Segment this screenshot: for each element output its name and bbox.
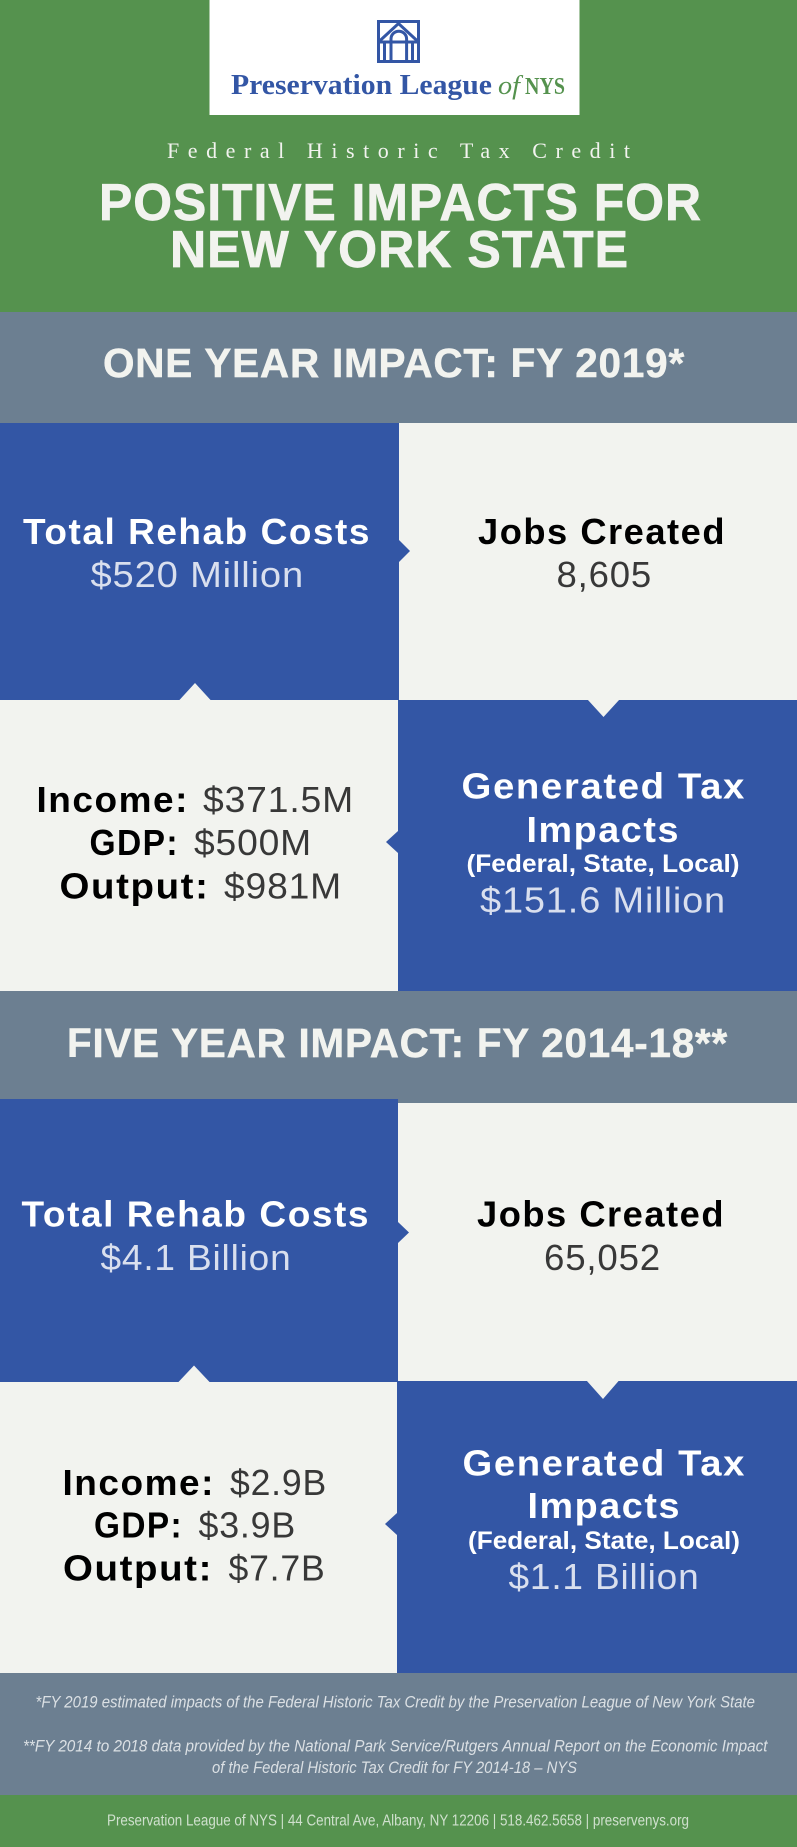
- logo wordmark: Preservation League: [231, 69, 492, 101]
- text: jobs created: [477, 1194, 725, 1278]
- text: income gdp output: $7.7B: [228, 1548, 326, 1588]
- panel: one year heading: ONE YEAR IMPACT: FY 2019*: [103, 340, 685, 386]
- text: total rehab costs: $520 Million: [90, 554, 304, 595]
- panel: one year heading: [0, 312, 797, 423]
- panel: five year heading: FIVE YEAR IMPACT: FY 2014-18**: [67, 1020, 728, 1066]
- arrow: five year right: [398, 1222, 409, 1243]
- text: income gdp output: Output:: [63, 1548, 213, 1588]
- text: income gdp output: Output:: [60, 866, 210, 906]
- logo suffix: [498, 71, 565, 100]
- text: total rehab costs: Total Rehab Costs: [23, 511, 371, 552]
- text: total rehab costs: $4.1 Billion: [100, 1237, 292, 1278]
- panel: footer: Preservation League of NYS | 44 Central Ave, Albany, NY 12206 | 518.462.5658 | preservenys.org: [107, 1812, 689, 1830]
- icon: historic building: [378, 22, 418, 62]
- text: jobs created: Jobs Created: [477, 1194, 725, 1234]
- arrow: five year left: [385, 1513, 397, 1535]
- panel: five year generated tax impacts: [397, 1381, 797, 1673]
- title: POSITIVE IMPACTS FOR: [99, 174, 702, 232]
- text: generated tax impacts: Generated Tax: [462, 1442, 746, 1484]
- panel: five year jobs created: [398, 1103, 797, 1382]
- text: income gdp output: Income:: [62, 1462, 215, 1503]
- panel: one year jobs created: [399, 423, 797, 700]
- text: income gdp output: $500M: [194, 822, 312, 863]
- title: NEW YORK STATE: [170, 221, 629, 279]
- arrow: one year right: [399, 540, 410, 562]
- arrow: one year up: [179, 683, 211, 700]
- text: income gdp output: $981M: [224, 866, 342, 906]
- logo: [210, 0, 580, 115]
- text: income gdp output: [62, 1462, 327, 1588]
- panel: footnotes: of the Federal Historic Tax Credit for FY 2014-18 – NYS: [212, 1758, 578, 1777]
- panel: one year generated tax impacts: [398, 700, 797, 991]
- text: income gdp output: $3.9B: [198, 1504, 296, 1546]
- text: income gdp output: GDP:: [94, 1504, 183, 1546]
- title: [99, 174, 702, 279]
- text: generated tax impacts: (Federal, State, Local): [468, 1527, 740, 1555]
- text: total rehab costs: Total Rehab Costs: [22, 1194, 370, 1234]
- panel: header: [0, 0, 797, 312]
- text: generated tax impacts: Impacts: [528, 1485, 681, 1526]
- text: generated tax impacts: [462, 1442, 746, 1597]
- text: jobs created: [478, 511, 726, 595]
- text: total rehab costs: [22, 1194, 370, 1278]
- panel: footnotes: [0, 1673, 797, 1795]
- text: income gdp output: $2.9B: [230, 1462, 327, 1503]
- panel: one year total rehab costs: [0, 423, 399, 700]
- panel: five year income gdp output: [0, 1382, 397, 1673]
- text: income gdp output: Income:: [36, 779, 189, 820]
- text: jobs created: 65,052: [544, 1237, 661, 1278]
- text: income gdp output: $371.5M: [203, 779, 354, 820]
- panel: footer: [0, 1795, 797, 1847]
- panel: one year income gdp output: [0, 700, 398, 991]
- arrow: one year down: [588, 700, 620, 717]
- text: generated tax impacts: $1.1 Billion: [508, 1556, 700, 1597]
- text: income gdp output: [36, 779, 354, 906]
- arrow: five year down: [586, 1380, 619, 1399]
- logo suffix: of: [498, 71, 524, 100]
- text: generated tax impacts: Impacts: [526, 809, 680, 850]
- panel: five year heading: [0, 991, 797, 1103]
- arrow: five year up: [178, 1366, 210, 1382]
- text: generated tax impacts: $151.6 Million: [480, 880, 726, 920]
- text: income gdp output: GDP:: [90, 822, 179, 863]
- panel: five year total rehab costs: [0, 1099, 398, 1382]
- text: generated tax impacts: (Federal, State, Local): [466, 850, 740, 878]
- text: jobs created: 8,605: [556, 554, 652, 595]
- text: generated tax impacts: [462, 766, 746, 920]
- subtitle: Federal Historic Tax Credit: [167, 138, 630, 163]
- arrow: one year left: [386, 831, 398, 853]
- text: total rehab costs: [23, 511, 371, 595]
- logo suffix: NYS: [525, 74, 565, 100]
- text: generated tax impacts: Generated Tax: [462, 766, 746, 806]
- text: jobs created: Jobs Created: [478, 511, 726, 552]
